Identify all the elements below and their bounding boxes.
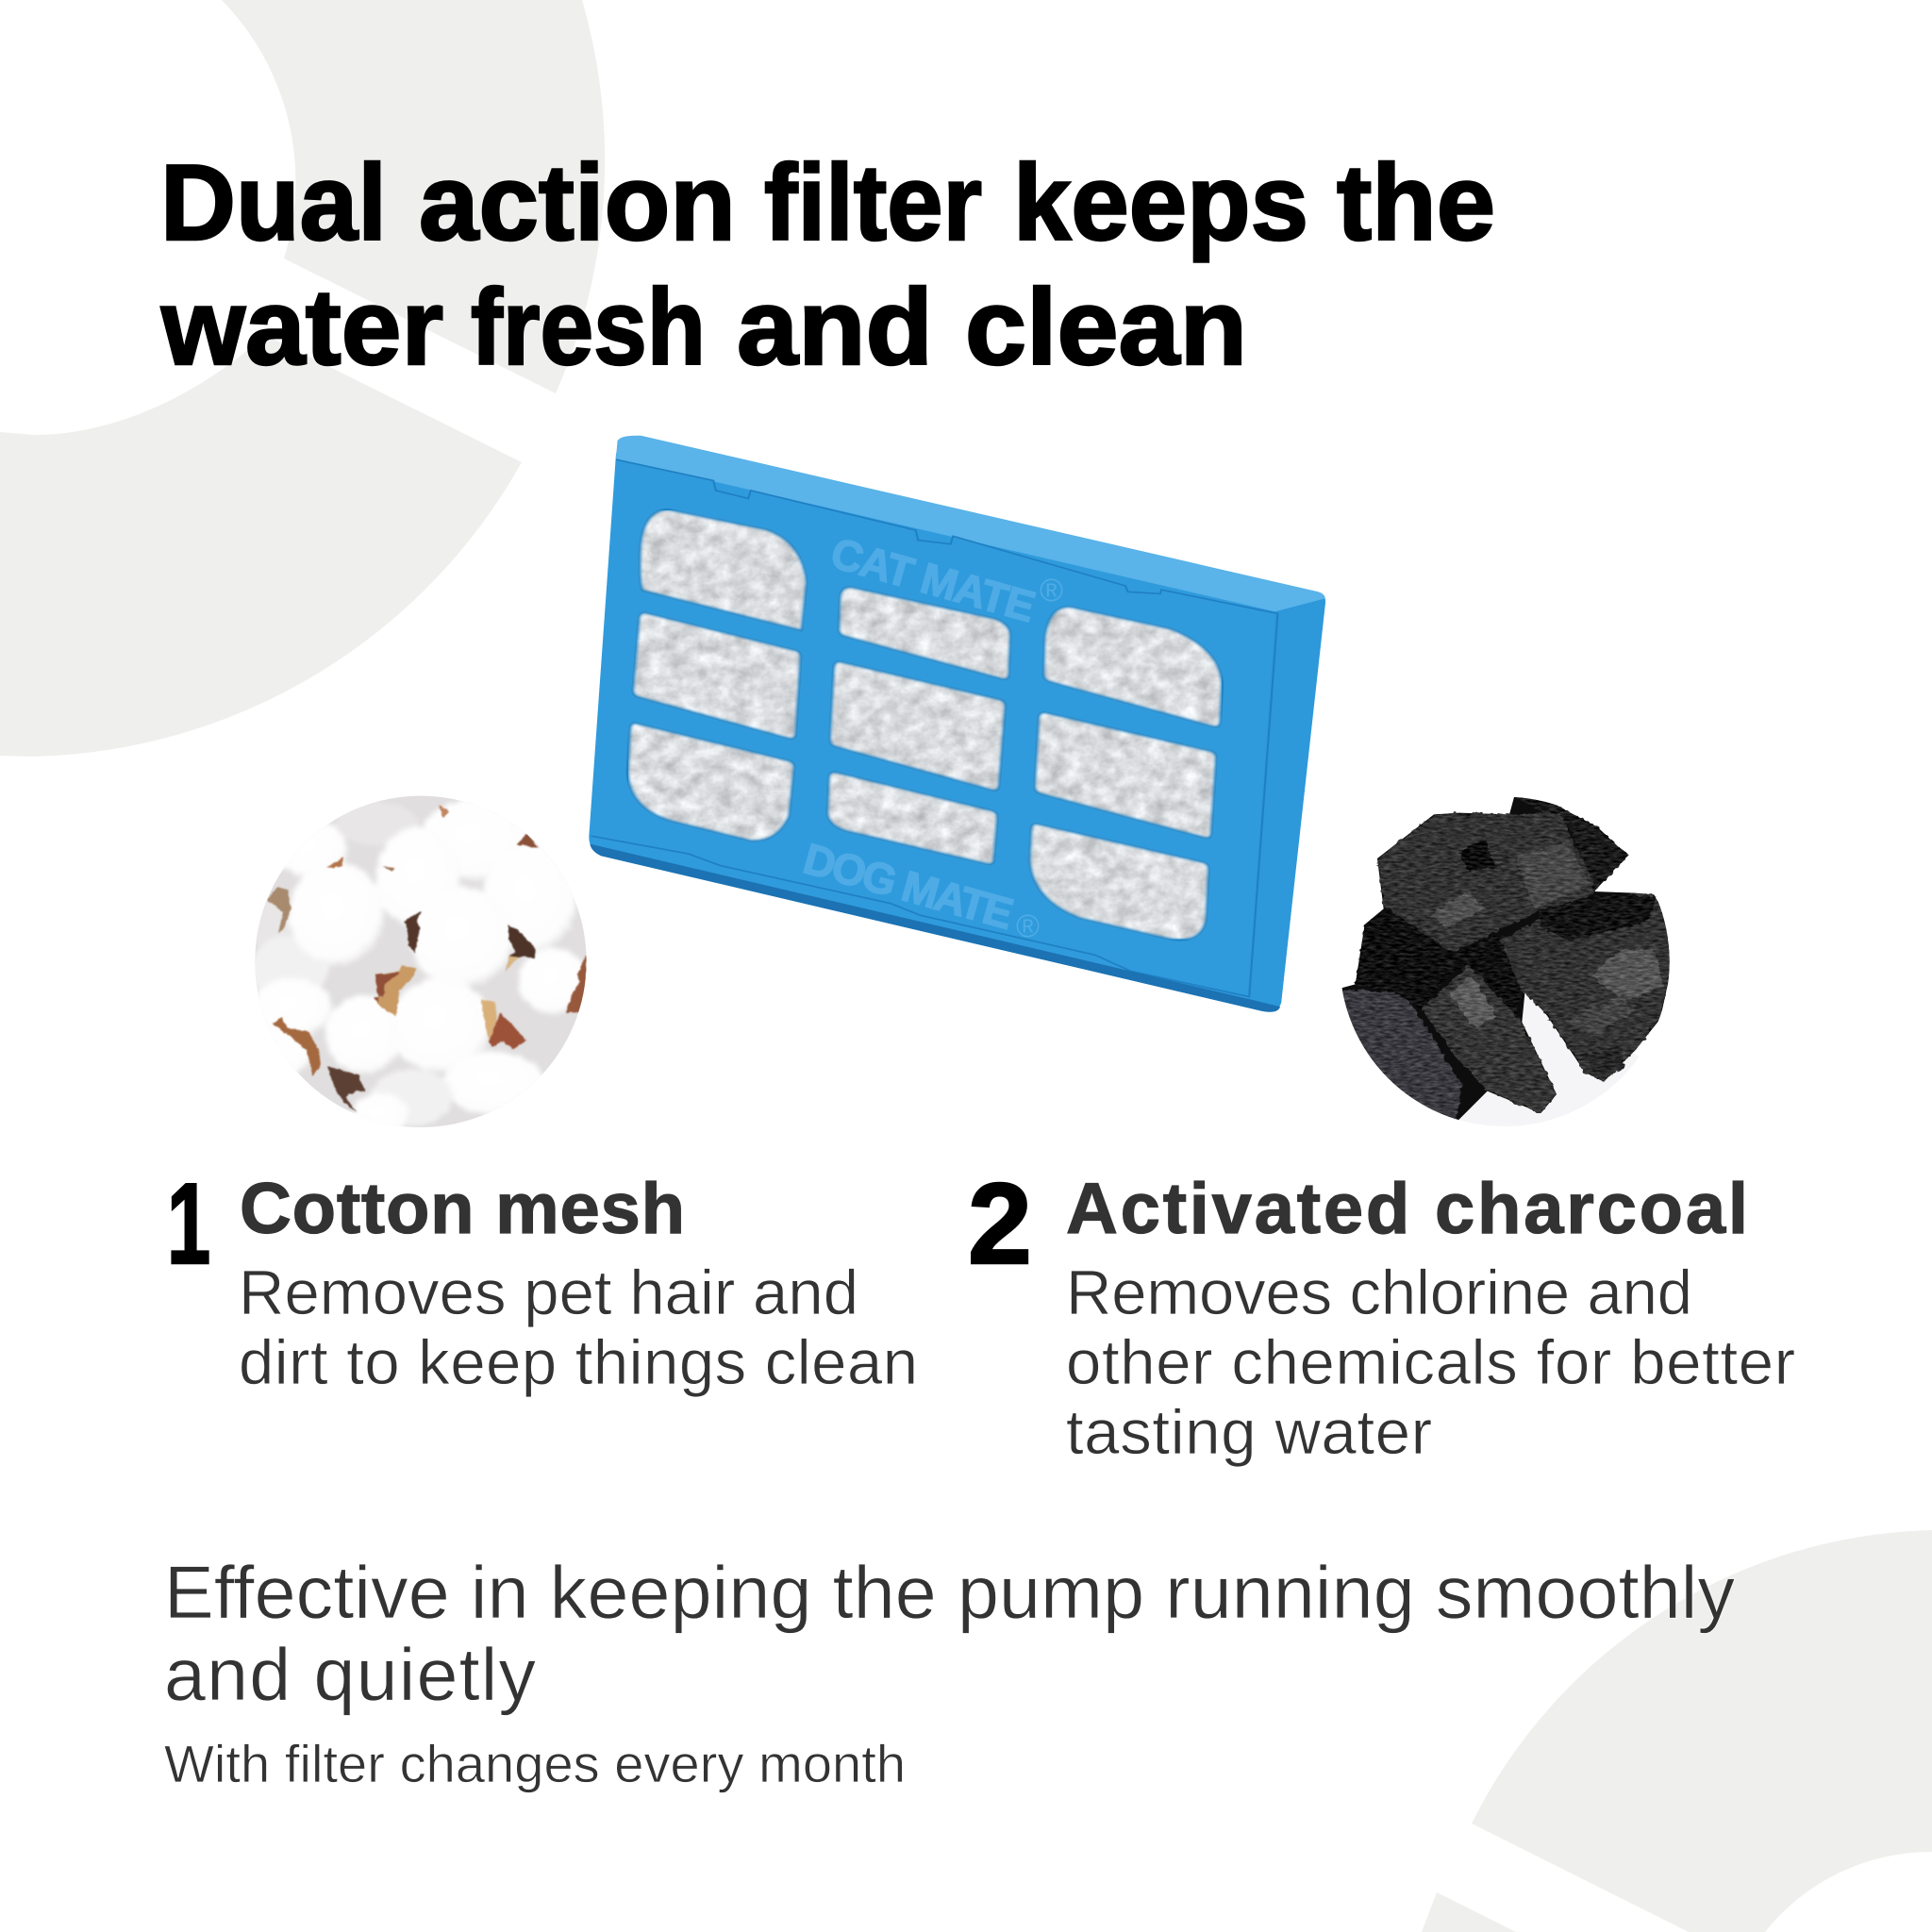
title xyxy=(160,143,1495,388)
charcoal lumps xyxy=(1338,797,1670,1123)
heading: cotton mesh: Cotton mesh xyxy=(240,1169,685,1249)
feature 2: activated charcoal xyxy=(968,1159,1795,1468)
cotton background xyxy=(252,792,591,1132)
title: and xyxy=(737,268,933,388)
filter top edge xyxy=(616,436,1325,611)
description: activated charcoal: tasting water xyxy=(1066,1397,1432,1468)
description: cotton mesh xyxy=(239,1257,918,1398)
embossed label: CAT MATE: CAT MATE xyxy=(825,528,1041,631)
filter window recess xyxy=(628,510,1222,939)
title: action xyxy=(419,143,736,263)
cotton husks xyxy=(267,805,587,1113)
product image: blue filter cartridge xyxy=(589,436,1325,1012)
feature 1: cotton mesh xyxy=(167,1160,918,1398)
description: activated charcoal: Removes chlorine and xyxy=(1066,1257,1692,1328)
filter outlines xyxy=(591,459,1277,997)
closing statement: Effective in keeping the pump running smoothly xyxy=(164,1550,1736,1634)
title: water xyxy=(160,268,443,388)
filter media xyxy=(628,510,1222,939)
description: cotton mesh: dirt to keep things clean xyxy=(239,1327,918,1398)
title: filter xyxy=(764,143,982,263)
embossed label: DOG MATE: DOG MATE xyxy=(798,834,1019,939)
footnote: With filter changes every month xyxy=(164,1734,906,1793)
number 1: 1 xyxy=(167,1160,210,1289)
photo circle: charcoal xyxy=(1338,797,1670,1129)
registered mark top: ® xyxy=(1040,573,1063,608)
registered mark bottom: ® xyxy=(1016,908,1040,944)
filter body xyxy=(589,436,1325,1011)
number 2: 2 xyxy=(968,1159,1032,1288)
title: keeps xyxy=(1013,143,1308,263)
heading: activated charcoal: Activated charcoal xyxy=(1066,1169,1748,1249)
charcoal mass xyxy=(1338,797,1670,1123)
description: cotton mesh: Removes pet hair and xyxy=(239,1257,858,1328)
photo circle: cotton xyxy=(248,792,591,1137)
title: fresh xyxy=(471,268,706,388)
title: the xyxy=(1337,143,1495,263)
description: activated charcoal xyxy=(1066,1257,1795,1468)
closing statement: and quietly xyxy=(164,1632,536,1716)
title: Dual xyxy=(160,143,387,263)
description: activated charcoal: other chemicals for better xyxy=(1066,1327,1795,1398)
cotton bolls xyxy=(248,799,588,1137)
charcoal ground xyxy=(1460,993,1640,1126)
title: clean xyxy=(965,268,1247,388)
background shape: top-left ring xyxy=(0,0,605,757)
closing statement xyxy=(164,1550,1736,1716)
filter bottom shadow edge xyxy=(590,844,1280,1012)
background shape: bottom-right ring xyxy=(1422,1530,1932,1932)
filter right edge xyxy=(1248,598,1325,1011)
